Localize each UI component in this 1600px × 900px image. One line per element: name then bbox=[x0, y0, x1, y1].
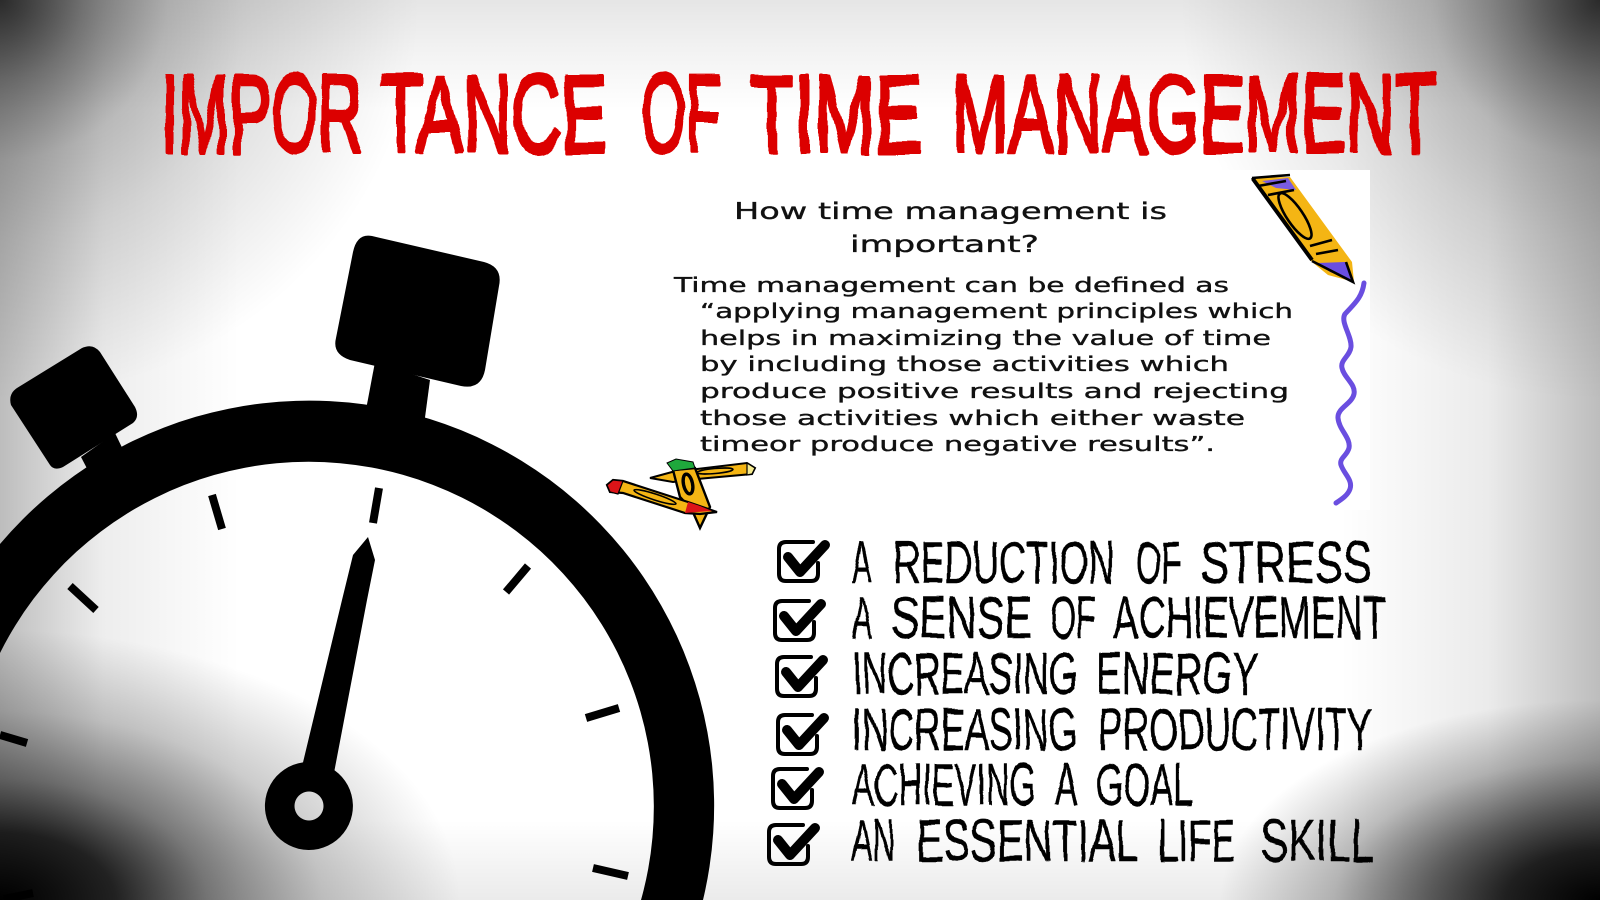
title: IMPOR bbox=[161, 53, 363, 176]
icon: yellow pencil top right bbox=[1252, 175, 1354, 282]
list item: increasing productivity: INCREASING bbox=[852, 697, 1077, 763]
list item: a reduction of stress: A bbox=[852, 530, 872, 596]
pencil: rear horizontal bbox=[650, 463, 755, 482]
list item: a sense of achievement: ACHIEVEMENT bbox=[1113, 585, 1386, 651]
list item: a sense of achievement: A bbox=[852, 585, 872, 651]
text block: definition: by including those activities which bbox=[700, 352, 1229, 376]
list item: increasing productivity: PRODUCTIVITY bbox=[1098, 697, 1372, 763]
text block: definition: “applying management principles which bbox=[700, 299, 1293, 323]
list item: an essential life skill bbox=[769, 808, 1374, 874]
text block: definition: Time management can be defined as bbox=[673, 273, 1229, 297]
icon: purple squiggle line bbox=[1336, 283, 1364, 503]
heading: how time management is important bbox=[734, 199, 1167, 258]
stopwatch illustration bbox=[0, 236, 714, 900]
large crown button bbox=[335, 236, 500, 425]
list item: an essential life skill: LIFE bbox=[1158, 808, 1235, 874]
heading: how time management is important: important? bbox=[850, 232, 1039, 258]
list item: a reduction of stress: REDUCTION bbox=[893, 530, 1115, 596]
list item: achieving a goal: GOAL bbox=[1096, 752, 1193, 818]
title: TANCE bbox=[380, 53, 607, 176]
list item: an essential life skill: ESSENTIAL bbox=[916, 808, 1138, 874]
list item: an essential life skill: SKILL bbox=[1260, 808, 1374, 874]
list item: increasing productivity bbox=[778, 697, 1372, 763]
list item: a sense of achievement bbox=[775, 585, 1386, 651]
list item: increasing energy: INCREASING bbox=[852, 641, 1077, 707]
checklist bbox=[769, 530, 1386, 874]
text block: definition: timeor produce negative results”. bbox=[700, 432, 1215, 456]
title: TIME bbox=[750, 53, 923, 176]
text block: definition: those activities which either waste bbox=[700, 406, 1245, 430]
clock hand bbox=[265, 537, 375, 850]
list item: an essential life skill: AN bbox=[852, 808, 895, 874]
text block: definition: produce positive results and rejecting bbox=[700, 379, 1289, 403]
list item: achieving a goal: ACHIEVING bbox=[852, 752, 1036, 818]
text block: definition: helps in maximizing the value of time bbox=[700, 326, 1271, 350]
pencil: red cap bbox=[607, 480, 717, 514]
heading: how time management is important: How time management is bbox=[734, 199, 1167, 225]
dial tick marks bbox=[0, 488, 628, 899]
list item: a sense of achievement: SENSE bbox=[891, 585, 1032, 651]
list item: increasing energy: ENERGY bbox=[1096, 641, 1258, 707]
list item: achieving a goal: A bbox=[1055, 752, 1078, 818]
title: OF bbox=[641, 53, 721, 176]
stopwatch ring bbox=[0, 401, 714, 900]
text block: definition bbox=[673, 273, 1293, 456]
panel: definition card bbox=[607, 170, 1370, 528]
icon: crossed pencils bbox=[607, 459, 755, 528]
title bbox=[161, 53, 1436, 176]
small side button bbox=[10, 346, 137, 480]
list item: a reduction of stress bbox=[779, 530, 1372, 596]
pencil: green top bbox=[667, 459, 710, 528]
list item: a reduction of stress: OF bbox=[1136, 530, 1181, 596]
list item: a sense of achievement: OF bbox=[1051, 585, 1096, 651]
list item: a reduction of stress: STRESS bbox=[1200, 530, 1372, 596]
